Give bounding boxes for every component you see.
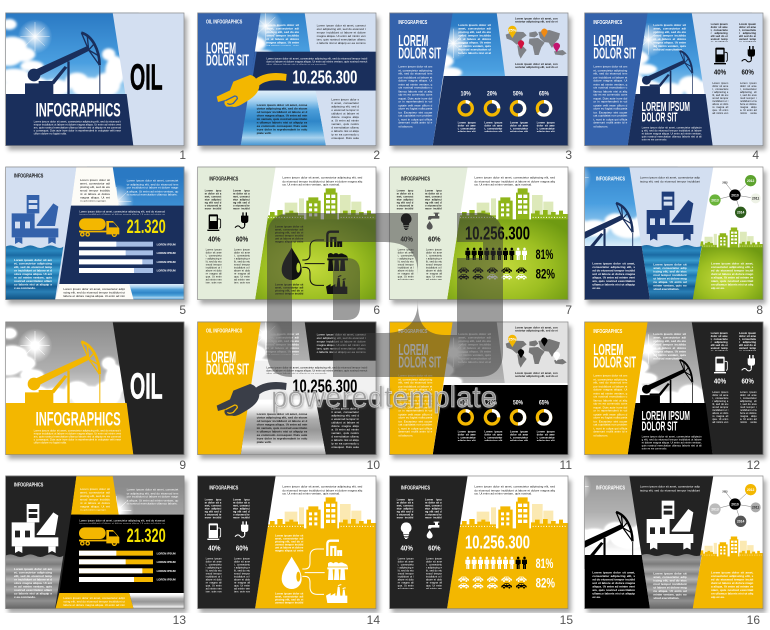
icon: oil pump jack xyxy=(25,342,100,405)
page numbers: 9 xyxy=(179,458,186,472)
chart labels: 65% xyxy=(539,399,549,406)
panel: slide 11: DOLOR SIT xyxy=(398,355,441,372)
panel: slide 12: DOLOR SIT xyxy=(593,355,636,372)
text block: left column: Lorem ipsum dolor sit amet, consectetur adipiscing elit, sed do eiusmod tempor incididunt ut labore et dolore magna aliqua. Ut enim ad minim veniam, quis nostrud exercitation ullamco laboris nisi ut aliquip ex ea commodo consequat. Duis aute irure dolor in reprehenderit in voluptate velit esse cillum dolore eu fugiat nulla pariatur. Excepteur sint occaecat cupidatat non proident, sunt in culpa qui officia deserunt mollit anim id est laborum. xyxy=(593,374,627,437)
map pin label: 25% xyxy=(508,28,517,33)
icon: fuel pump xyxy=(714,48,727,64)
stat: 82%: 82% xyxy=(536,574,555,590)
panel: slide 4 xyxy=(584,12,764,146)
heading: infographics: INFOGRAPHICS xyxy=(401,177,430,183)
chart labels: 65% xyxy=(539,90,549,97)
panel: slide 3 xyxy=(389,12,568,146)
timeline diagram: 2015 xyxy=(722,491,728,493)
stat: 60%: 60% xyxy=(428,544,441,553)
heading: infographics: INFOGRAPHICS xyxy=(596,177,625,183)
heading: infographics: INFOGRAPHICS xyxy=(14,482,43,488)
page numbers: 1 xyxy=(179,148,186,162)
icon: map pin 25% xyxy=(508,26,517,38)
map pin label: 25% xyxy=(508,337,517,342)
panel: slide 12 xyxy=(584,322,764,455)
text block: black panel: Lorem ipsum dolor sit amet, consectetur adipiscing elit, sed do eiusmod tempor incididunt ut labore et dolore magna aliqua. Ut enim ad minim veniam, quis nostrud exercitation ullamco laboris nisi ut aliquip ex ea. xyxy=(592,571,635,599)
chart labels: 50% xyxy=(513,399,523,406)
illustration: yellow city xyxy=(693,537,763,557)
heading: lorem: LOREM xyxy=(206,40,236,57)
timeline diagram: 2013 xyxy=(711,507,719,511)
page numbers: 3 xyxy=(565,148,572,162)
pictogram: cars 82% xyxy=(458,268,527,280)
heading: oil infographics: OIL INFOGRAPHICS xyxy=(206,20,242,26)
text blocks under donuts xyxy=(458,121,555,132)
stat: 60%: 60% xyxy=(236,544,249,553)
page numbers xyxy=(173,148,763,627)
bar labels xyxy=(157,242,176,273)
icon: fuel pump xyxy=(714,357,727,373)
icon: plug xyxy=(742,46,755,62)
bar labels: LOREM IPSUM xyxy=(157,578,176,582)
icon: fuel pump xyxy=(207,214,221,231)
text block: water: Lorem ipsum dolor sit amet, consectetur adipiscing elit, sed do eiusmod tempor incididunt ut labore et dolore magna aliqua. Ut enim ad minim veniam, quis nostrud exercitation ullamco laboris nisi ut aliquip ex ea commodo. xyxy=(14,258,52,290)
stat: 81%: 81% xyxy=(536,555,554,571)
timeline diagram: 2014 xyxy=(737,211,745,215)
heading: infographics: INFOGRAPHICS xyxy=(398,20,427,26)
illustration: green city xyxy=(459,188,568,220)
illustration: yellow city xyxy=(459,497,568,529)
icon: map pin black xyxy=(518,349,524,358)
icon: plug xyxy=(235,521,248,537)
heading: INFOGRAPHICS: INFOGRAPHICS xyxy=(36,410,121,431)
heading: lorem: LOREM xyxy=(593,33,623,50)
timeline diagram: 2013 xyxy=(711,198,719,202)
stat: 40%: 40% xyxy=(208,544,221,553)
stat: 60%: 60% xyxy=(741,377,754,386)
bar labels: LOREM IPSUM xyxy=(157,242,176,246)
icon: faucet xyxy=(427,213,439,230)
panel: slide 2 xyxy=(197,12,376,146)
stat: 82%: 82% xyxy=(536,265,555,281)
panel: slide 4: DOLOR SIT xyxy=(593,46,636,63)
heading: infographics: INFOGRAPHICS xyxy=(14,173,43,179)
chart: world map xyxy=(506,30,567,59)
heading: lorem ipsum: LOREM IPSUM xyxy=(642,100,690,114)
chart labels: 10% xyxy=(461,90,471,97)
pictogram: cars 82% xyxy=(458,577,527,589)
bar chart xyxy=(79,242,153,273)
panel: slide 14 xyxy=(197,476,376,609)
text block: green: Lorem ipsum dolor sit amet, consectetur adipiscing elit, sed do eiusmod tempor incididunt ut labore et dolore magna aliqua. Ut enim ad minim veniam, quis nostrud exercitation ullamco laboris nisi ut aliquip ex ea. xyxy=(711,262,753,290)
timeline diagram: 2011 xyxy=(752,197,759,201)
text block: photo: Lorem ipsum dolor sit amet, consectetur adipiscing elit, sed do eiusmod tempor incididunt ut labore et dolore magna aliqua. Ut enim ad minim veniam, quis nostrud exercitation. xyxy=(653,23,686,51)
watermark: poweredtemplate: poweredtemplate xyxy=(271,381,497,414)
timeline diagram xyxy=(709,484,761,527)
heading: infographics: INFOGRAPHICS xyxy=(593,20,622,26)
panel: slide 2: DOLOR SIT xyxy=(206,53,249,70)
page numbers: 11 xyxy=(560,458,572,472)
page numbers: 13 xyxy=(173,613,186,627)
page numbers: 15 xyxy=(560,613,573,627)
page numbers: 4 xyxy=(752,148,759,162)
text block: yellow: Lorem ipsum dolor sit amet, consectetur adipiscing elit, sed do eiusmod tempor incididunt ut labore et dolore magna aliqua. Ut enim ad minim veniam, quis nostrud exercitation ullamco laboris nisi ut aliquip ex ea. xyxy=(711,571,753,599)
icon: oil pump jack xyxy=(565,512,633,569)
panel: slide 15 xyxy=(389,476,568,609)
icon: nozzle trigger xyxy=(225,96,237,104)
illustration: green city xyxy=(267,188,376,220)
icon: plug xyxy=(235,212,248,228)
text block: water: Lorem ipsum dolor sit amet, consectetur adipiscing elit, sed do eiusmod tempor incididunt ut labore et dolore magna aliqua. Ut enim ad minim veniam, quis nostrud exercitation ullamco laboris nisi ut aliquip ex ea commodo. xyxy=(14,567,52,599)
icon: oil pump jack xyxy=(640,360,693,404)
text block: Lorem ipsum dolor sit amet, consectetur adipiscing elit, sed do eiusmod tempor incididunt ut labore et dolore magna aliqua. Ut enim ad minim veniam, quis nostrud exercitation ullamco laboris nisi ut aliquip ex ea commodo consequat. Duis aute irure dolor in reprehenderit in voluptate velit esse cillum dolore eu fugiat nulla. xyxy=(34,429,121,444)
panel: slide 5 xyxy=(5,166,184,300)
bar chart xyxy=(79,551,153,582)
bar labels: LOREM IPSUM xyxy=(157,260,176,264)
photo: water xyxy=(5,554,63,609)
text block: water: Lorem ipsum dolor sit amet, consectetur adipiscing elit, sed do eiusmod tempor incididunt ut labore et dolore magna aliqua. Ut enim ad minim veniam, quis nostrud exercitation ullamco laboris nisi ut aliquip ex ea commodo consequat. Duis aute irure dolor in reprehenderit in voluptate velit. xyxy=(257,103,307,135)
heading: infographics: INFOGRAPHICS xyxy=(401,486,430,492)
bar labels: LOREM IPSUM xyxy=(157,551,176,555)
icon: fuel nozzle xyxy=(217,382,287,416)
chart labels: 50% xyxy=(513,90,523,97)
icon: oil rig xyxy=(12,195,58,244)
panel: slide 10 xyxy=(197,322,376,455)
bar labels xyxy=(157,551,176,582)
heading: dolor sit: DOLOR SIT xyxy=(642,420,677,434)
pictogram: people 81% xyxy=(465,248,527,260)
stat: 40%: 40% xyxy=(714,68,727,77)
panel: slide 10: DOLOR SIT xyxy=(206,362,249,379)
panel: slide 1 xyxy=(5,12,184,146)
timeline diagram: 2012 xyxy=(747,179,755,183)
timeline diagram: 2012 xyxy=(747,488,755,492)
panel: slide 16 xyxy=(584,476,764,609)
icon: nozzle trigger xyxy=(225,405,237,413)
stat: 60%: 60% xyxy=(236,235,249,244)
diagram: oil drop to energy uses xyxy=(282,541,348,603)
page numbers: 7 xyxy=(565,303,572,317)
page numbers: 12 xyxy=(747,458,760,472)
icon: fuel pump xyxy=(207,523,221,540)
bar labels: LOREM IPSUM xyxy=(157,569,176,573)
timeline diagram: 2010 xyxy=(731,502,739,506)
icon: oil rig xyxy=(12,504,58,553)
illustration: green city xyxy=(693,228,763,248)
icon: oil rig xyxy=(647,501,693,550)
page numbers: 6 xyxy=(373,303,380,317)
diagram: oil drop to energy uses xyxy=(282,232,348,294)
icon: light bulb xyxy=(401,213,412,230)
heading: lorem: LOREM xyxy=(398,33,428,50)
heading: lorem ipsum: LOREM IPSUM xyxy=(642,409,690,423)
icon: map pin black xyxy=(541,338,547,347)
stat: 60%: 60% xyxy=(741,68,754,77)
stat: 40%: 40% xyxy=(714,377,727,386)
chart: donuts xyxy=(459,411,551,424)
bar labels: LOREM IPSUM xyxy=(157,269,176,273)
page numbers: 14 xyxy=(367,613,380,627)
heading: infographics: INFOGRAPHICS xyxy=(209,486,238,492)
heading: INFOGRAPHICS: INFOGRAPHICS xyxy=(36,101,121,122)
heading: infographics: INFOGRAPHICS xyxy=(593,329,622,335)
heading: infographics: INFOGRAPHICS xyxy=(398,329,427,335)
stat: 40%: 40% xyxy=(400,544,413,553)
icon: map pin 25% xyxy=(508,335,517,347)
icon: map pin orange xyxy=(541,29,547,38)
chart labels: 20% xyxy=(487,399,497,406)
text block: water: Lorem ipsum dolor sit amet, consectetur adipiscing elit, sed do eiusmod tempor incididunt ut labore et dolore magna aliqua. Ut enim ad minim veniam, quis nostrud exercitation. xyxy=(653,572,687,600)
icon: map pin red xyxy=(518,40,524,49)
icon: oil pump jack xyxy=(640,51,693,95)
text block: photo: Lorem ipsum dolor sit amet, consectetur adipiscing elit, sed do eiusmod tempor incididunt ut labore et dolore magna aliqua. Ut enim ad minim veniam, quis nostrud exercitation ullamco laboris. xyxy=(127,488,178,505)
heading: dolor sit: DOLOR SIT xyxy=(642,111,677,125)
text block: left column: Lorem ipsum dolor sit amet, consectetur adipiscing elit, sed do eiusmod tempor incididunt ut labore et dolore magna aliqua. Ut enim ad minim veniam, quis nostrud exercitation ullamco laboris nisi ut aliquip ex ea commodo consequat. Duis aute irure dolor in reprehenderit in voluptate velit esse cillum dolore eu fugiat nulla pariatur. Excepteur sint occaecat cupidatat non proident, sunt in culpa qui officia deserunt mollit anim id est laborum. xyxy=(593,65,627,128)
stat: 40%: 40% xyxy=(208,235,221,244)
icon: fuel nozzle xyxy=(217,73,287,107)
page numbers: 5 xyxy=(179,303,186,317)
panel: slide 11 xyxy=(389,322,568,455)
text block: left column: Lorem ipsum dolor sit amet, consectetur adipiscing elit, sed do eiusmod tempor incididunt ut labore et dolore magna aliqua. Ut enim ad minim veniam, quis nostrud exercitation ullamco laboris nisi ut aliquip ex ea commodo consequat. Duis aute irure dolor in reprehenderit in voluptate velit esse cillum dolore eu fugiat nulla pariatur. Excepteur sint occaecat cupidatat non proident, sunt in culpa qui officia deserunt mollit anim id est laborum. xyxy=(398,374,432,437)
timeline diagram: 2015 xyxy=(722,182,728,184)
icon: light bulb xyxy=(401,522,412,539)
stat: 81%: 81% xyxy=(536,246,554,262)
pictogram: people 81% xyxy=(465,557,527,569)
chart: donuts xyxy=(459,102,551,115)
panel: slide 3: DOLOR SIT xyxy=(398,46,441,63)
timeline diagram: 2014 xyxy=(737,520,745,524)
bar labels: LOREM IPSUM xyxy=(157,560,176,564)
timeline diagram: 2010 xyxy=(731,193,739,197)
icon: map pin magenta xyxy=(553,43,560,52)
chart labels: 20% xyxy=(487,90,497,97)
timeline diagram: 2011 xyxy=(752,506,759,510)
heading: lorem: LOREM xyxy=(593,342,623,359)
number: 21.320: 21.320 xyxy=(127,217,166,238)
panel: slide 9 xyxy=(5,322,184,455)
icon: oil pump jack xyxy=(25,33,100,96)
icon: faucet xyxy=(427,522,439,539)
number: 10.256.300: 10.256.300 xyxy=(465,222,530,243)
icon: oil rig xyxy=(647,192,693,241)
page numbers: 2 xyxy=(373,148,380,162)
text block: Lorem ipsum dolor sit amet, consectetur adipiscing elit, sed do eiusmod tempor incididunt ut labore et dolore magna aliqua. Ut enim ad minim veniam, quis nostrud exercitation ullamco laboris nisi ut aliquip ex ea commodo consequat. Duis aute irure dolor in reprehenderit in voluptate velit esse cillum dolore eu fugiat nulla. xyxy=(34,120,121,135)
text block: navy: Lorem ipsum dolor sit amet, consectetur adipiscing elit, sed do eiusmod tempor incididunt ut labore et dolore magna aliqua. Ut enim ad minim veniam, quis nostrud exercitation ullamco laboris nisi ut aliquip ex ea. xyxy=(592,262,635,290)
panel: slide 13 xyxy=(5,476,184,609)
icon: oil pump jack xyxy=(565,203,633,260)
text block: water: Lorem ipsum dolor sit amet, consectetur adipiscing elit, sed do eiusmod tempor incididunt ut labore et dolore magna aliqua. Ut enim ad minim veniam, quis nostrud exercitation ullamco laboris nisi ut aliquip ex ea commodo consequat. Duis aute irure dolor in reprehenderit in voluptate velit. xyxy=(257,412,307,444)
text block: left column: Lorem ipsum dolor sit amet, consectetur adipiscing elit, sed do eiusmod tempor incididunt ut labore et dolore magna aliqua. Ut enim ad minim veniam, quis nostrud exercitation ullamco laboris nisi ut aliquip ex ea commodo consequat. Duis aute irure dolor in reprehenderit in voluptate velit esse cillum dolore eu fugiat nulla pariatur. Excepteur sint occaecat cupidatat non proident, sunt in culpa qui officia deserunt mollit anim id est laborum. xyxy=(398,65,432,128)
text blocks under donuts xyxy=(458,430,555,441)
heading: lorem: LOREM xyxy=(206,349,236,366)
chart: world map xyxy=(506,339,567,368)
number: 10.256.300: 10.256.300 xyxy=(465,531,530,552)
heading: oil infographics: OIL INFOGRAPHICS xyxy=(206,329,242,335)
heading: lorem: LOREM xyxy=(398,342,428,359)
heading: infographics: INFOGRAPHICS xyxy=(596,486,625,492)
panel: slide 6 xyxy=(197,166,376,300)
panel: slide 8 xyxy=(584,166,764,300)
icon: tanker truck xyxy=(79,527,119,545)
photo: water xyxy=(5,245,63,300)
watermark: pt logo xyxy=(267,213,503,377)
illustration: yellow city xyxy=(267,497,376,529)
stat: 40%: 40% xyxy=(400,235,413,244)
icon: plug xyxy=(742,355,755,371)
chart labels xyxy=(461,90,549,97)
timeline diagram xyxy=(709,175,761,218)
panel: slide 7 xyxy=(389,166,568,300)
chart labels xyxy=(461,399,549,406)
text block: photo: Lorem ipsum dolor sit amet, consectetur adipiscing elit, sed do eiusmod tempor incididunt ut labore et dolore magna aliqua. Ut enim ad minim veniam, quis nostrud exercitation ullamco laboris. xyxy=(127,179,178,196)
heading: infographics: INFOGRAPHICS xyxy=(209,177,238,183)
text block: water: Lorem ipsum dolor sit amet, consectetur adipiscing elit, sed do eiusmod tempor incididunt ut labore et dolore magna aliqua. Ut enim ad minim veniam, quis nostrud exercitation. xyxy=(653,263,687,291)
number: 21.320: 21.320 xyxy=(127,526,166,547)
text block: photo: Lorem ipsum dolor sit amet, consectetur adipiscing elit, sed do eiusmod tempor incididunt ut labore et dolore magna aliqua. Ut enim ad minim veniam, quis nostrud exercitation. xyxy=(653,332,686,360)
chart labels: 10% xyxy=(461,399,471,406)
page numbers: 16 xyxy=(747,613,760,627)
icon: tanker truck xyxy=(79,218,119,236)
bar labels: LOREM IPSUM xyxy=(157,251,176,255)
stat: 60%: 60% xyxy=(428,235,441,244)
page numbers: 8 xyxy=(756,303,763,317)
page numbers: 10 xyxy=(367,458,380,472)
icon: map pin white xyxy=(553,352,560,361)
